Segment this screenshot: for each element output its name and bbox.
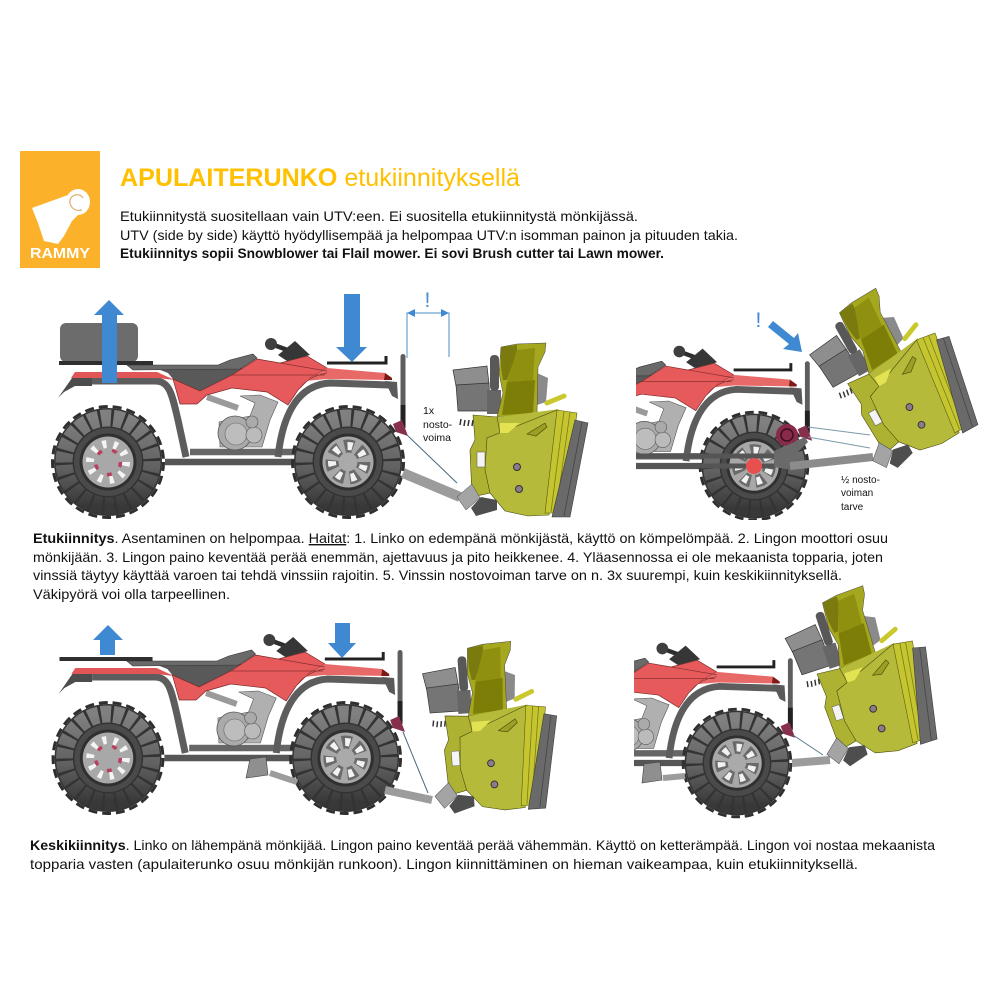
text block: front mount: vinssiä täytyy käyttää varoen tai tehdä vinssiin rajoitin. 5. Vinssin nostovoiman tarve on n. 3x suurempi, kuin keskikiinnityksellä. [33, 567, 842, 583]
lift force label: voima [423, 432, 451, 444]
diagonal blue arrow [768, 321, 802, 352]
frame bars, hub and winch spool [636, 424, 808, 474]
ATV cropped front [636, 346, 812, 520]
half lift force label: voiman [841, 488, 873, 499]
dimension arrow with warning mark [407, 289, 449, 358]
panel: mid mount, raised [634, 585, 938, 818]
text block: front mount: mönkijään. 3. Lingon paino keventää perää enemmän, ajettavuus ja pito heikkenee. 4. Yläasennossa ei ole mekaanista topparia, joten [33, 549, 883, 565]
intro text block [120, 208, 738, 261]
text block: mid mount [30, 837, 935, 872]
lift arm and wires [790, 427, 873, 466]
warning mark: ! [756, 309, 761, 332]
intro text block: Etukiinnitystä suositellaan vain UTV:een. Ei suositella etukiinnitystä mönkijässä. [120, 208, 638, 224]
half lift force label: ½ nosto- [841, 475, 880, 486]
title: APULAITERUNKO etukiinnityksellä [120, 164, 520, 192]
snowblower [453, 343, 588, 517]
text block: mid mount: topparia vasten (apulaiterunko osuu mönkijän runkoon). Lingon kiinnittäminen on hieman vaikeampaa, kuin etukiinnityksellä. [30, 856, 858, 872]
lift force label [423, 405, 453, 444]
text block: mid mount: Keskikiinnitys. Linko on lähempänä mönkijää. Lingon paino keventää perää vähemmän. Käyttö on ketterämpää. Lingon voi nostaa mekaanista [30, 837, 935, 853]
text block: front mount: Etukiinnitys. Asentaminen on helpompaa. Haitat: 1. Linko on edempänä mönkijästä, käyttö on kömpelömpää. 2. Lingon moottori osuu [33, 530, 888, 546]
snowblower tilted [797, 268, 993, 480]
ATV side view [53, 634, 405, 814]
ATV side view [52, 338, 408, 518]
half lift force label [841, 475, 880, 513]
snowblower [421, 638, 563, 816]
lift arm and winch wire [403, 435, 460, 497]
snowblower tilted [777, 573, 954, 774]
mid bracket and arm [642, 735, 830, 783]
dimension arrow with warning mark: ! [424, 289, 430, 312]
mid bracket and arm [246, 732, 432, 800]
panel: front mount, lowered [52, 289, 588, 518]
lift force label: 1x [423, 405, 435, 417]
logo: Rammy orange badge with ram [20, 151, 100, 268]
logo: Rammy orange badge with ram: RAMMY [30, 245, 90, 262]
panel: front mount, raised [636, 288, 978, 520]
blue down arrow [328, 623, 356, 658]
intro text block: UTV (side by side) käyttö hyödyllisempää ja helpompaa UTV:n isomman painon ja pituuden takia. [120, 227, 738, 243]
text block: front mount [33, 530, 888, 602]
half lift force label: tarve [841, 502, 864, 513]
ATV cropped front [634, 642, 796, 818]
lift force label: nosto- [423, 419, 453, 431]
blue up arrow [94, 300, 124, 383]
blue up arrow [93, 625, 123, 655]
panel: mid mount, lowered [53, 623, 563, 816]
cargo box on rear rack [60, 323, 138, 362]
text block: front mount: Väkipyörä voi olla tarpeellinen. [33, 586, 230, 602]
intro text block: Etukiinnitys sopii Snowblower tai Flail mower. Ei sovi Brush cutter tai Lawn mower. [120, 245, 664, 261]
blue down arrow [336, 294, 367, 362]
